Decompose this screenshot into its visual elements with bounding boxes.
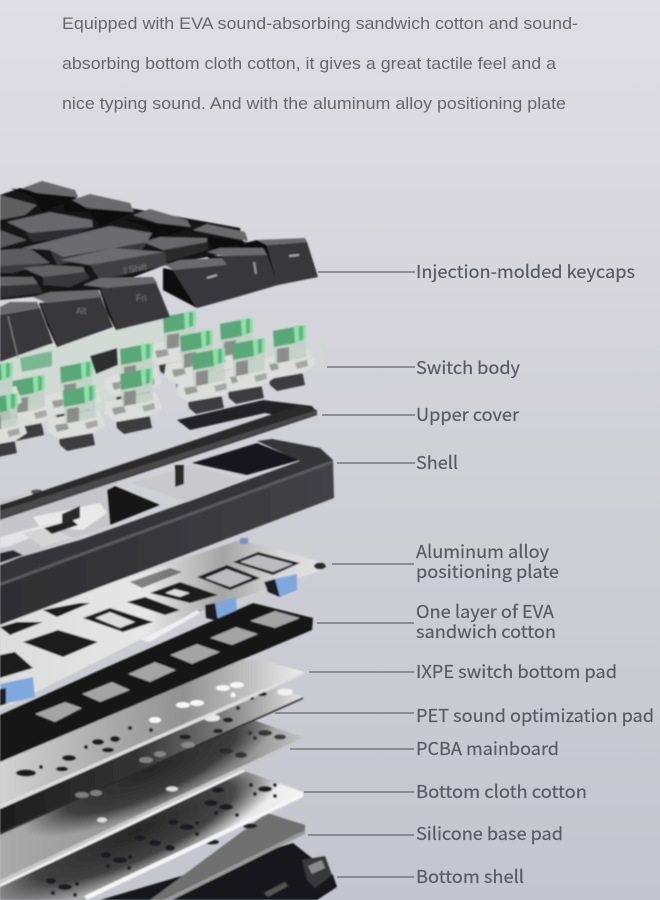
front row keycaps (0, 277, 170, 362)
label: Switch body: Switch body (416, 355, 520, 380)
upper cover frame (0, 400, 317, 524)
bottom cloth cotton layer (0, 770, 303, 900)
front row keycaps: Fn (136, 293, 147, 303)
left blue clip (0, 677, 35, 706)
label: Aluminum alloy positioning plate: positioning plate (416, 559, 559, 584)
intro text block (62, 15, 578, 113)
aluminum alloy positioning plate layer (0, 540, 327, 710)
back rows of keycaps: ⇧Shift (121, 262, 148, 276)
label: Injection-molded keycaps: Injection-molded keycaps (416, 259, 635, 284)
label: One layer of EVA sandwich cotton: One layer of EVA (416, 599, 554, 624)
intro text block: nice typing sound. And with the aluminum alloy positioning plate (62, 95, 566, 113)
exploded keyboard illustration (0, 181, 337, 900)
label: Bottom cloth cotton: Bottom cloth cotton (416, 779, 587, 804)
label: Shell: Shell (416, 450, 458, 475)
label: One layer of EVA sandwich cotton (317, 599, 556, 644)
label: Upper cover: Upper cover (416, 402, 519, 427)
switch body layer (0, 311, 325, 459)
label: PCBA mainboard: PCBA mainboard (416, 736, 559, 761)
blue stabilizer clips (205, 538, 297, 621)
back rows of keycaps (0, 181, 248, 300)
EVA sandwich cotton layer (0, 603, 313, 762)
bottom shell layer (100, 843, 337, 900)
label: Aluminum alloy positioning plate: Aluminum alloy (416, 539, 549, 564)
label: One layer of EVA sandwich cotton: sandwich cotton (416, 619, 556, 644)
label: Aluminum alloy positioning plate (332, 539, 559, 584)
intro text block: absorbing bottom cloth cotton, it gives a great tactile feel and a (62, 55, 557, 73)
arrow keycaps (163, 238, 318, 308)
intro text block: Equipped with EVA sound-absorbing sandwich cotton and sound- (62, 15, 578, 33)
IXPE switch bottom pad layer (0, 660, 305, 809)
PCBA mainboard layer (0, 720, 302, 884)
front row keycaps: Alt (76, 306, 87, 316)
label: Bottom shell: Bottom shell (416, 864, 524, 889)
PET sound optimization pad layer (0, 688, 303, 835)
label: Shell (337, 450, 458, 475)
label: IXPE switch bottom pad: IXPE switch bottom pad (416, 659, 617, 684)
shell frame (0, 439, 334, 625)
injection-molded keycaps layer (0, 181, 318, 362)
label: PET sound optimization pad: PET sound optimization pad (416, 703, 654, 728)
silicone base pad layer (150, 813, 305, 900)
label: Silicone base pad: Silicone base pad (416, 821, 563, 846)
